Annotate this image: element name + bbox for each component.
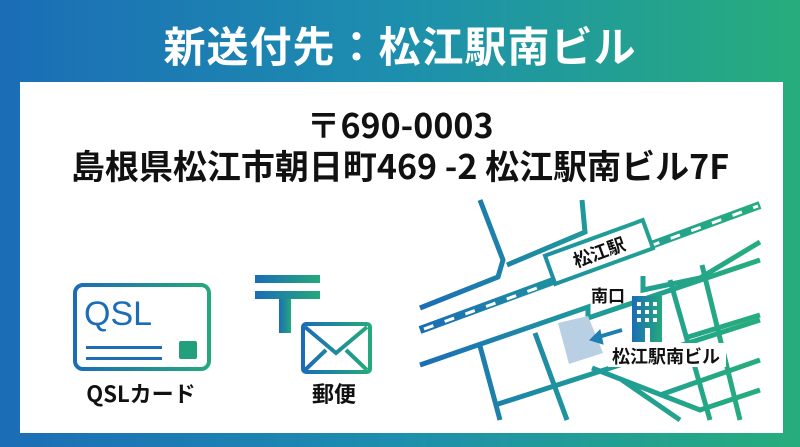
label: QSL card: QSLカード [86,377,196,409]
station box: 松江駅 [569,231,629,273]
title: 新送付先：松江駅南ビル [163,14,636,75]
label: postal: 郵便 [312,377,356,409]
map [420,200,760,420]
address: 島根県松江市朝日町469 -2 松江駅南ビル7F [71,140,729,189]
building label: 松江駅南ビル [612,343,720,369]
icon: QSL card [75,285,209,369]
arrow [590,330,622,344]
icon: building [632,296,662,342]
icon: postal mark and envelope [255,275,370,372]
panel: white address panel [20,82,783,433]
station box [545,220,653,284]
target building block [558,316,603,364]
postal code: 〒690-0003 [306,99,494,148]
exit label: 南口 [591,282,625,307]
icon: QSL card: QSL [84,295,152,333]
